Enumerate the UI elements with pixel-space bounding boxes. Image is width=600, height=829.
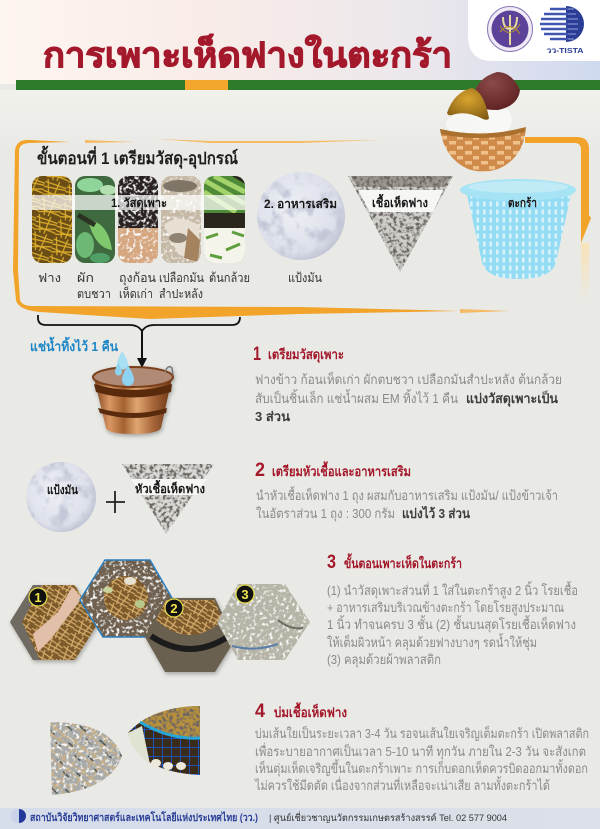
photo: tapioca flour circle: แป้งมัน (47, 483, 79, 497)
labels: substrate names: ตบชวา (77, 287, 111, 301)
photo: tapioca flour (257, 172, 345, 260)
title rule (16, 80, 600, 90)
icon: blue plastic basket (460, 179, 576, 279)
photo: mushroom spawn (348, 176, 453, 272)
text: section 1 body: แบ่งวัสดุเพาะเป็น (466, 389, 558, 407)
labels: substrate names: เปลือกมัน (159, 271, 204, 285)
photo: tapioca flour: 2. อาหารเสริม (264, 197, 337, 211)
text: section 3 body (327, 581, 578, 668)
text: section 2 body: ในอัตราส่วน 1 ถุง : 300 กรัม (256, 506, 395, 522)
heading: section 4: บ่มเชื้อเห็ดฟาง (274, 702, 347, 720)
brace: groups substrates (38, 315, 240, 331)
photo: step 3 plastic-covered baskets (217, 584, 310, 660)
label: tapioca flour: แป้งมัน (288, 271, 322, 285)
badge: 2: 2 (170, 601, 178, 616)
photo: rice straw (32, 176, 72, 263)
badge: 2 (165, 599, 183, 617)
labels: substrate names: ผัก (77, 271, 94, 285)
heading: section 3: 3 (327, 552, 336, 573)
labels: substrate names: ฟาง (38, 271, 61, 285)
logo: TISTA: วว-TISTA (546, 46, 584, 55)
band: substrate label: 1. วัสดุเพาะ (111, 196, 167, 211)
photos: basket layering hexagons (10, 560, 310, 672)
heading: step 1: ขั้นตอนที่ 1 เตรียมวัสดุ-อุปกรณ์ (37, 145, 238, 169)
text: section 4 body: ไม่ควรใช้มีดตัด เนื่องจากส่วนที่เหลือจะเน่าเสีย ลามทั้งตะกร้าได้ (254, 776, 550, 793)
photo: old mushroom bags (118, 176, 158, 263)
logo: institute seal (488, 6, 532, 52)
photo: water spinach (75, 176, 116, 263)
heading: section 2: เตรียมหัวเชื้อและอาหารเสริม (272, 461, 411, 479)
photo: mushroom spawn: เชื้อเห็ดฟาง (372, 193, 428, 210)
text: section 2 body (256, 486, 558, 522)
lighter band below header (0, 90, 600, 150)
photo: blue basket with mushrooms (128, 706, 200, 775)
photo: tapioca flour circle (26, 462, 96, 532)
footer bar (0, 808, 600, 829)
badge: 1 (29, 588, 47, 606)
text: section 1 body (255, 370, 562, 424)
text: contact: | ศูนย์เชี่ยวชาญนวัตกรรมเกษตรสร้างสรรค์ Tel. 02 577 9004 (269, 811, 507, 824)
heading: section 2: 2 (255, 460, 265, 481)
heading: section 3: ขั้นตอนเพาะเห็ดในตะกร้า (344, 553, 462, 571)
heading: section 1 (253, 344, 344, 365)
badge: 3 (236, 585, 254, 603)
heading: section 4 (255, 701, 347, 722)
text: section 1 body: 3 ส่วน (255, 409, 290, 424)
title: การเพาะเห็ดฟางในตะกร้า (43, 33, 452, 75)
labels: substrate names: ต้นกล้วย (209, 271, 250, 285)
text: section 3 body: ให้เต็มผิวหน้า คลุมด้วยฟางบางๆ รดน้ำให้ชุ่ม (327, 633, 537, 651)
text: section 2 body: นำหัวเชื้อเห็ดฟาง 1 ถุง ผสมกับอาหารเสริม แป้งมัน/ แป้งข้าวเจ้า (256, 486, 558, 504)
heading: section 4: 4 (255, 701, 265, 722)
icon: wooden bucket (93, 367, 173, 434)
photo: chopped banana stem (204, 176, 245, 263)
icon: blue plastic basket: ตะกร้า (508, 196, 537, 210)
labels: substrate names: ถุงก้อน (119, 271, 156, 286)
text: section 3 body: 1 นิ้ว ทำจนครบ 3 ชั้น (2) ชั้นบนสุดโรยเชื้อเห็ดฟาง (327, 615, 576, 633)
heading: section 1: 1 (253, 344, 261, 365)
photo: mycelium close-up (50, 722, 122, 795)
text: institute name: สถาบันวิจัยวิทยาศาสตร์และเทคโนโลยีแห่งประเทศไทย (วว.) (30, 811, 258, 824)
heading: section 1: เตรียมวัสดุเพาะ (268, 347, 344, 363)
logo panel (468, 0, 600, 61)
text: section 3 body: (3) คลุมด้วยผ้าพลาสติก (327, 652, 441, 668)
panel: step 1 materials frame (13, 137, 591, 319)
icon: water drops (115, 351, 134, 386)
badge: 1: 1 (34, 590, 42, 605)
labels: substrate names: เห็ดเก่า (119, 286, 153, 301)
icon: mushrooms in wicker basket (440, 72, 526, 172)
photo: spawn triangle: หัวเชื้อเห็ดฟาง (135, 479, 205, 496)
text: section 1 body: สับเป็นชิ้นเล็ก แช่น้ำผสม EM ทิ้งไว้ 1 คืน (255, 389, 458, 406)
photo: step 1 hand in basket (10, 585, 97, 660)
heading: section 3 (327, 552, 462, 573)
text: section 1 body: ฟางข้าว ก้อนเห็ดเก่า ผักตบชวา เปลือกมันสำปะหลัง ต้นกล้วย (255, 370, 562, 387)
header background (0, 0, 600, 84)
photo: step 2 basket (145, 598, 235, 672)
arrow: into bucket (137, 331, 147, 368)
photo: spawn triangle (122, 464, 214, 534)
label: soak overnight: แช่น้ำทิ้งไว้ 1 คืน (30, 336, 118, 354)
icon: footer logo (11, 809, 26, 823)
band: substrate label (32, 195, 245, 211)
badge: 3: 3 (241, 587, 249, 602)
icon: plus (106, 491, 125, 513)
text: section 2 body: แบ่งไว้ 3 ส่วน (402, 505, 470, 521)
photo: step 1 basket top view (80, 560, 172, 637)
text: section 4 body (254, 724, 589, 793)
labels: substrate names (38, 271, 250, 301)
labels: substrate names: สำปะหลัง (159, 287, 203, 301)
photo: cassava peel (161, 176, 201, 263)
heading: section 2 (255, 460, 411, 481)
